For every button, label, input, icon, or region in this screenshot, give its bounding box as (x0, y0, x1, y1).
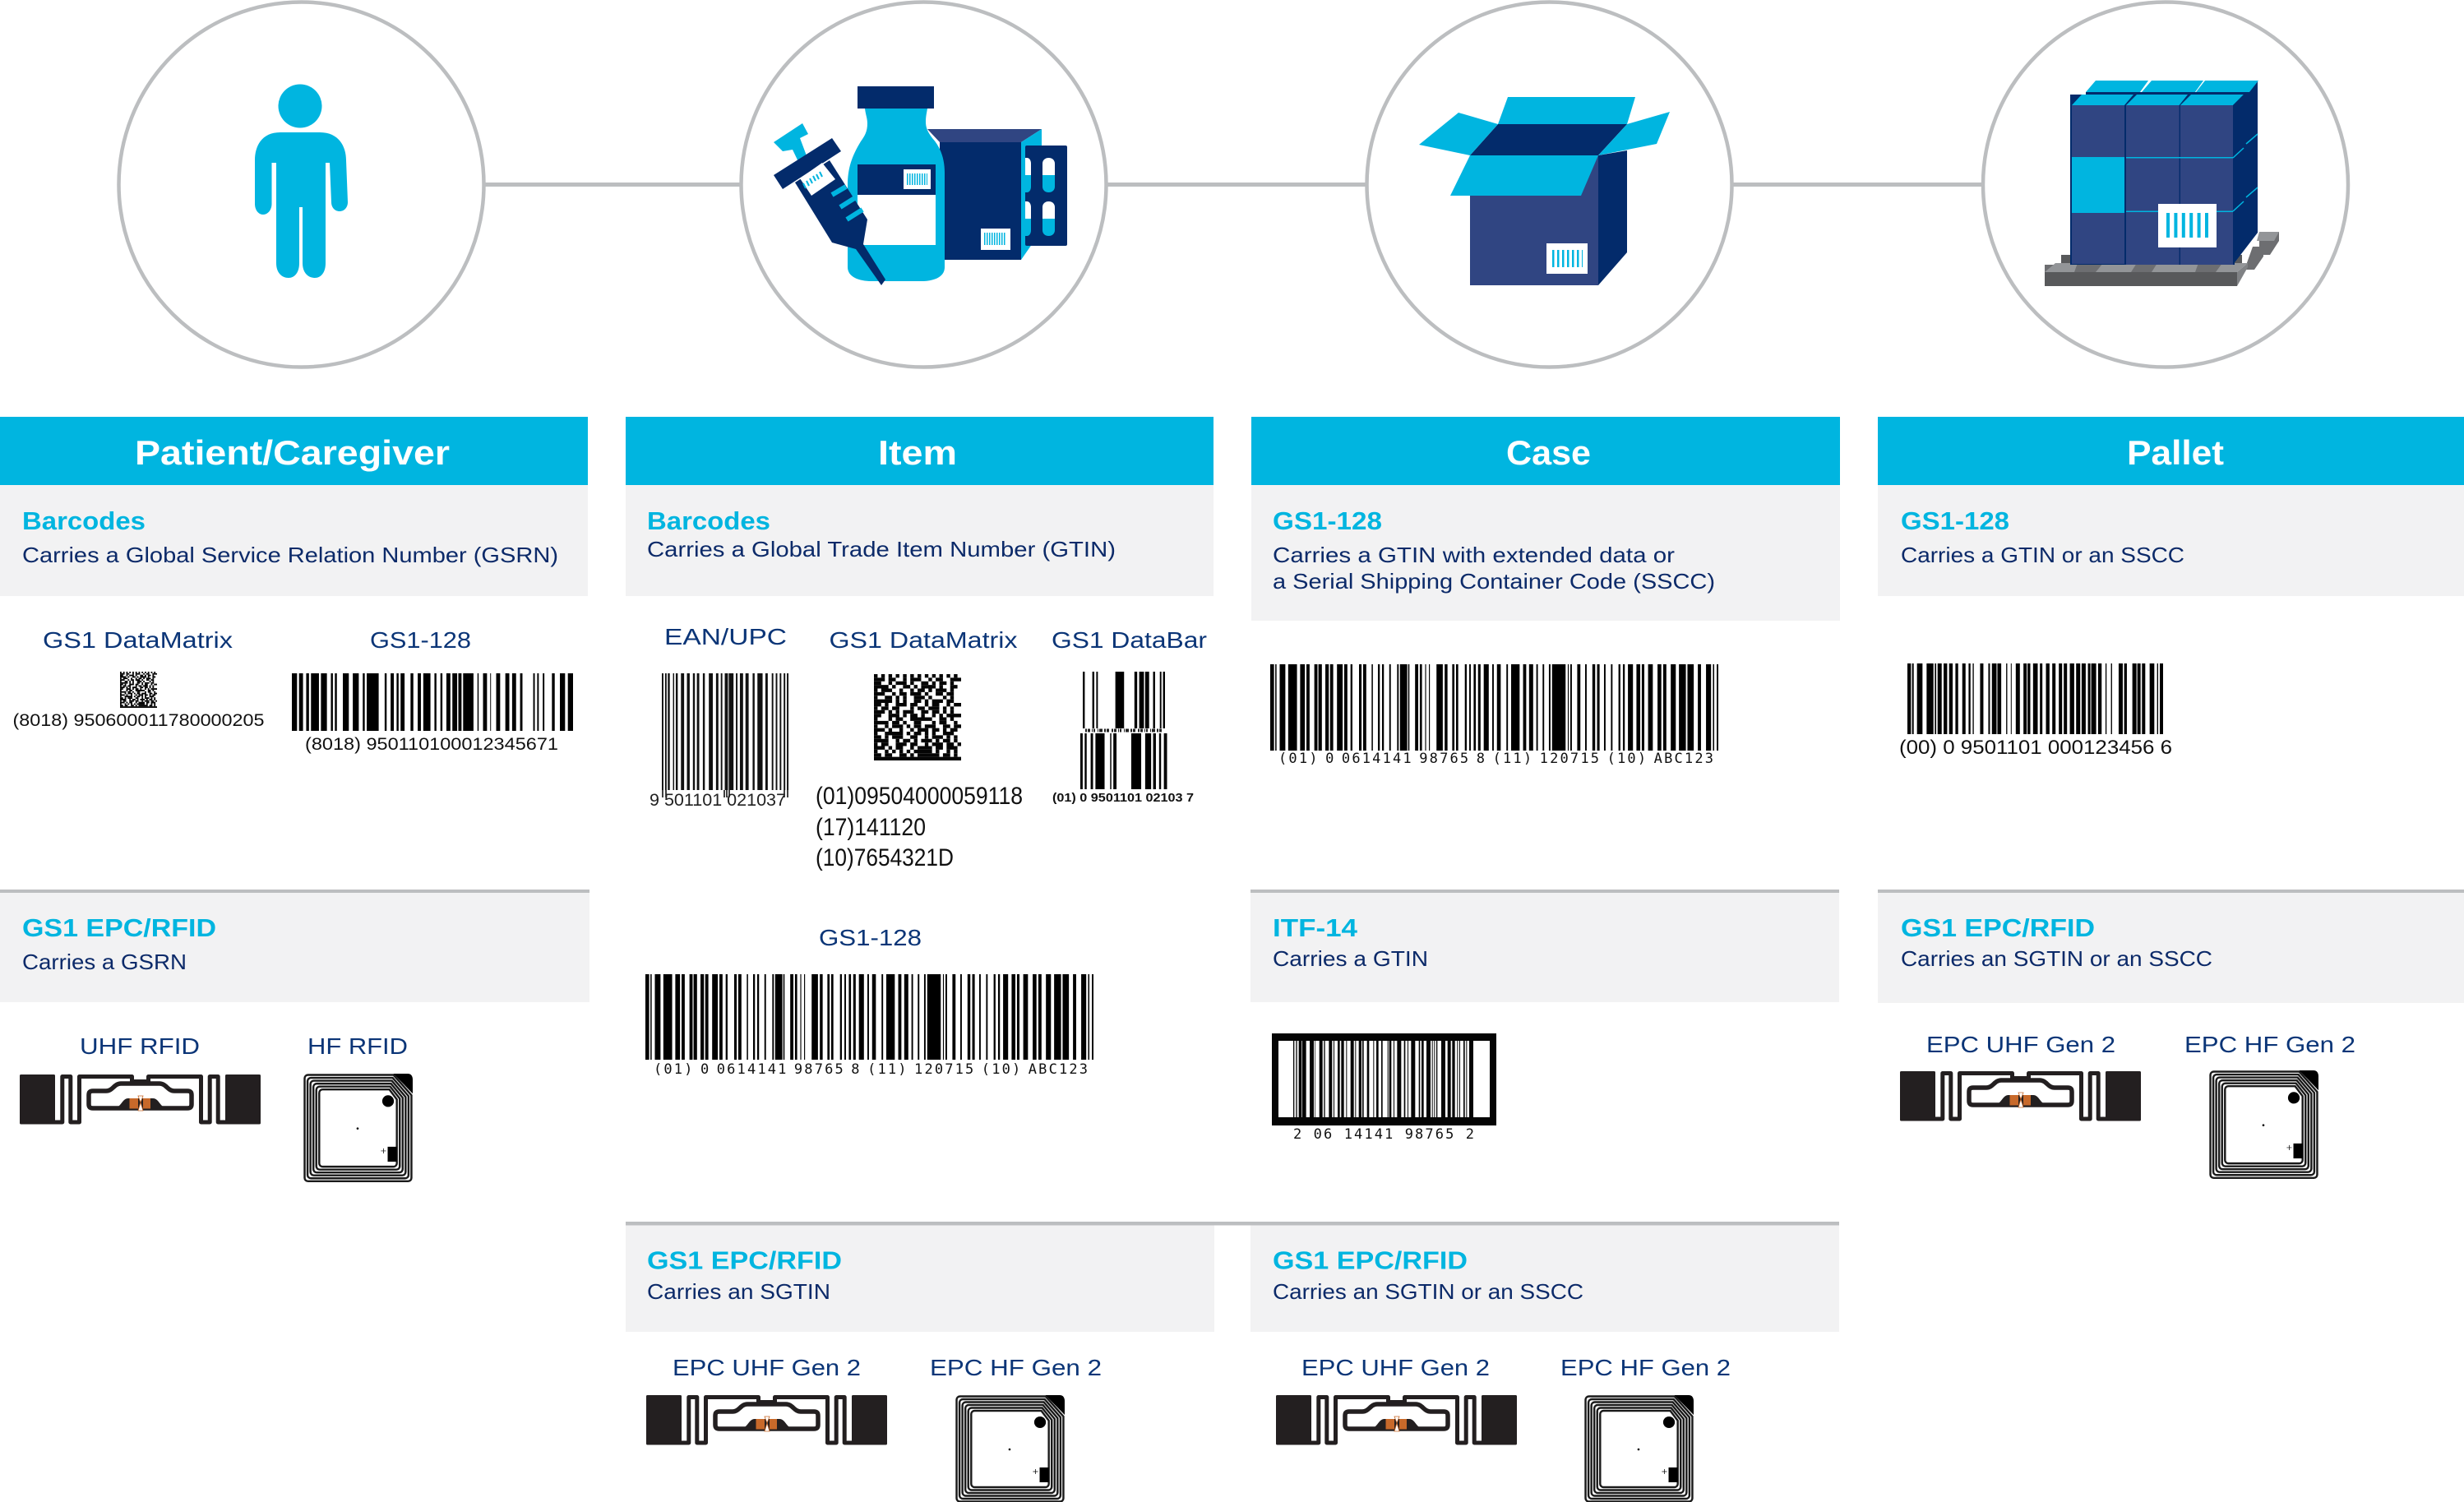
panel: GS1 EPC/RFID: Carries an SGTIN (647, 1279, 830, 1304)
column: Case (1250, 417, 1840, 1501)
tag: EPC HF Gen 2 (2184, 1032, 2355, 1178)
tag: UHF RFID (20, 1033, 261, 1125)
barcode: GS1-128: (8018) 950110100012345671 (305, 735, 558, 754)
tag: UHF RFID: UHF RFID (80, 1033, 200, 1059)
divider and panel: ITF-14: ITF-14 (1273, 913, 1358, 942)
tag: EPC UHF Gen 2 (1900, 1032, 2141, 1121)
column: Item (626, 417, 1214, 1501)
panel: GS1-128 description: Carries a GTIN with extended data or (1273, 543, 1675, 567)
header: Patient/Caregiver (0, 417, 588, 485)
panel: barcodes description: Barcodes (22, 506, 146, 535)
tag: EPC UHF Gen 2: EPC UHF Gen 2 (673, 1355, 861, 1380)
barcode: GS1-128 with extended data: GS1-128 (819, 925, 922, 950)
tag: EPC HF Gen 2: EPC HF Gen 2 (1560, 1355, 1731, 1380)
panel: barcodes description (0, 485, 588, 596)
barcode: GS1-128: (01) 0 0614141 98765 8 (11) 120715 (10) ABC123 (1278, 751, 1713, 767)
barcode: GS1 DataBar (1052, 627, 1207, 805)
barcode: GS1-128 with extended data: (01) 0 0614141 98765 8 (11) 120715 (10) ABC123 (654, 1061, 1088, 1078)
barcode: GS1-128 SSCC: (00) 0 9501101 000123456 6 (1899, 737, 2172, 759)
icon: pallet of cases in circle (1983, 2, 2348, 367)
header: Patient/Caregiver: Patient/Caregiver (135, 433, 450, 472)
divider and panel: GS1 EPC/RFID (1878, 890, 2464, 1003)
header: Case (1251, 417, 1840, 485)
barcode: GS1 DataBar: GS1 DataBar (1052, 627, 1207, 653)
panel: barcodes description: Barcodes (647, 506, 770, 535)
panel: GS1-128 description (1251, 485, 1840, 621)
panel: GS1-128 description: Carries a GTIN or an SSCC (1901, 543, 2184, 567)
divider and panel: GS1 EPC/RFID: Carries a GSRN (22, 950, 187, 974)
barcode: GS1 DataMatrix: (17)141120 (816, 814, 926, 841)
panel: barcodes description: Carries a Global Service Relation Number (GSRN) (22, 543, 558, 567)
barcode: GS1 DataMatrix: GS1 DataMatrix (43, 627, 233, 653)
panel: GS1 EPC/RFID (626, 1225, 1214, 1332)
tag: EPC HF Gen 2: EPC HF Gen 2 (2184, 1032, 2355, 1057)
panel: GS1-128 description (1878, 485, 2464, 596)
divider and panel: GS1 EPC/RFID: Carries an SGTIN or an SSCC (1901, 946, 2212, 971)
barcode: GS1 DataBar: (01) 0 9501101 02103 7 (1052, 791, 1194, 805)
barcode: EAN/UPC: 9 501101 021037 (650, 791, 786, 810)
divider and panel: GS1 EPC/RFID: GS1 EPC/RFID (1901, 913, 2095, 942)
barcode: ITF-14 (1272, 1033, 1496, 1143)
divider and panel: GS1 EPC/RFID: GS1 EPC/RFID (22, 913, 216, 942)
divider and panel: ITF-14: Carries a GTIN (1273, 946, 1428, 971)
barcode: GS1 DataMatrix: (10)7654321D (816, 844, 954, 871)
tag: HF RFID: HF RFID (307, 1033, 408, 1059)
barcode: EAN/UPC (650, 624, 789, 810)
barcode: GS1 DataMatrix: GS1 DataMatrix (829, 627, 1018, 653)
tag: EPC HF Gen 2: EPC HF Gen 2 (930, 1355, 1102, 1380)
divider above bottom panels (626, 1222, 1839, 1225)
panel: GS1-128 description: GS1-128 (1273, 506, 1382, 535)
tag: EPC UHF Gen 2: EPC UHF Gen 2 (1301, 1355, 1490, 1380)
panel: GS1 EPC/RFID: GS1 EPC/RFID (647, 1246, 842, 1274)
barcode: GS1-128 with extended data (645, 925, 1093, 1078)
panel: GS1 EPC/RFID: Carries an SGTIN or an SSCC (1273, 1279, 1583, 1304)
barcode: GS1-128: GS1-128 (370, 627, 471, 653)
tag: HF RFID (305, 1033, 413, 1181)
header: Case: Case (1506, 433, 1591, 472)
panel: barcodes description (626, 485, 1214, 596)
header: Item (626, 417, 1214, 485)
panel: GS1 EPC/RFID (1250, 1225, 1839, 1332)
divider and panel: ITF-14 (1250, 890, 1839, 1002)
header: Pallet: Pallet (2127, 433, 2224, 472)
connector line: item to case (1107, 183, 1366, 187)
barcode: GS1 DataMatrix (13, 627, 265, 730)
barcode: GS1 DataMatrix (816, 627, 1023, 871)
divider and panel: GS1 EPC/RFID (0, 890, 589, 1002)
panel: GS1 EPC/RFID: GS1 EPC/RFID (1273, 1246, 1468, 1274)
header: Pallet (1878, 417, 2464, 485)
icon: open case box in circle (1366, 2, 1731, 367)
connector line: case to pallet (1732, 183, 1982, 187)
panel: barcodes description: Carries a Global Trade Item Number (GTIN) (647, 537, 1116, 562)
barcode: GS1 DataMatrix: (01)09504000059118 (816, 783, 1023, 810)
icon: patient in circle (118, 2, 483, 367)
barcode: EAN/UPC: EAN/UPC (664, 624, 787, 649)
barcode: ITF-14: 2 06 14141 98765 2 (1293, 1126, 1474, 1143)
column: Patient/Caregiver (0, 417, 589, 1181)
column: Pallet (1878, 417, 2464, 1178)
icon: item (bottle, syringe, box, blister) in circle (742, 2, 1107, 367)
tag: EPC UHF Gen 2 (646, 1355, 887, 1445)
panel: GS1-128 description: a Serial Shipping Container Code (SSCC) (1273, 569, 1715, 594)
barcode: GS1-128 (292, 627, 573, 754)
panel: GS1-128 description: GS1-128 (1901, 506, 2009, 535)
tag: EPC UHF Gen 2: EPC UHF Gen 2 (1926, 1032, 2115, 1057)
tag: EPC UHF Gen 2 (1276, 1355, 1517, 1445)
connector line: patient to item (484, 183, 741, 187)
barcode: GS1 DataMatrix: (8018) 950600011780000205 (13, 711, 265, 730)
tag: EPC HF Gen 2 (1560, 1355, 1731, 1501)
tag: EPC HF Gen 2 (930, 1355, 1102, 1501)
header: Item: Item (878, 433, 957, 472)
